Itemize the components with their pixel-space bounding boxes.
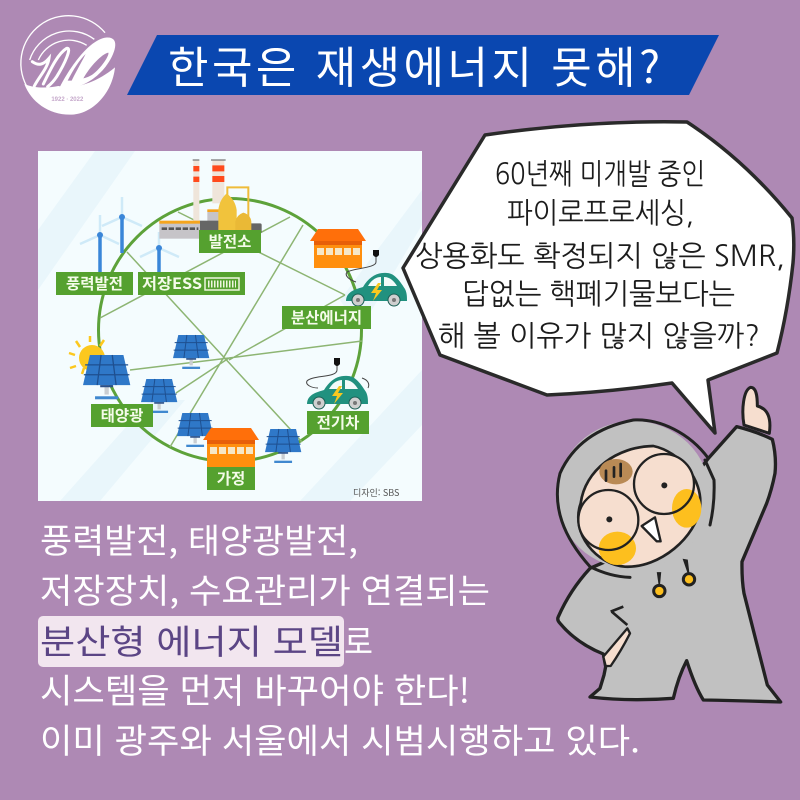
labels: network nodes: 분산에너지 <box>291 306 362 328</box>
bubble text: 해 볼 이유가 많지 않을까? <box>438 321 760 351</box>
hoodie strings <box>657 559 689 587</box>
glasses fill <box>634 454 694 514</box>
icon: houses <box>203 229 366 467</box>
body text: 로 <box>344 615 373 664</box>
icon: electric cars <box>307 250 407 409</box>
labels: network nodes: 가정 <box>217 467 245 489</box>
logo: university centennial emblem <box>21 16 115 115</box>
face <box>578 446 700 567</box>
birthmark <box>599 459 633 484</box>
icon: solar panels <box>83 335 301 463</box>
credit: 디자인: SBS <box>353 486 399 499</box>
labels: network nodes: 풍력발전 <box>66 272 123 294</box>
labels: network nodes: 태양광 <box>101 404 143 426</box>
body text <box>38 514 640 763</box>
panel: distributed energy network diagram <box>38 151 422 501</box>
raised hand <box>743 387 770 433</box>
hood <box>557 421 710 569</box>
bubble text <box>415 160 785 351</box>
labels: network nodes: 전기차 <box>317 411 359 433</box>
body text: 저장장치, 수요관리가 연결되는 <box>40 564 490 613</box>
title banner <box>127 32 719 96</box>
network ring <box>98 198 362 462</box>
pocket line <box>611 607 627 625</box>
title text: 한국은 재생에너지 못해? <box>168 32 660 96</box>
highlight: distributed energy model: 분산형 에너지 모델 <box>40 615 343 664</box>
body text: 풍력발전, 태양광발전, <box>40 514 358 563</box>
suit body <box>558 427 781 702</box>
logo: university centennial emblem: 1922 · 2022 <box>51 97 84 103</box>
labels: network nodes: 저장ESS <box>142 272 202 294</box>
character: hooded figure pointing up <box>557 387 781 702</box>
bubble text: 60년째 미개발 중인 <box>495 160 705 189</box>
glasses <box>634 454 694 514</box>
icon: wind turbines <box>80 197 179 272</box>
mouth <box>642 517 661 541</box>
lower hand <box>603 628 630 666</box>
icon: power plant <box>159 160 262 239</box>
bubble text: 상용화도 확정되지 않은 SMR, <box>415 241 785 271</box>
cheeks <box>672 489 701 528</box>
body text: 시스템을 먼저 바꾸어야 한다! <box>40 664 470 713</box>
bubble text: 답없는 핵폐기물보다는 <box>462 280 735 309</box>
speech bubble <box>403 122 794 433</box>
body text: 이미 광주와 서울에서 시범시행하고 있다. <box>40 714 640 763</box>
icon: sun <box>69 336 105 374</box>
eyes <box>661 482 667 488</box>
connection lines <box>100 212 362 447</box>
labels: network nodes <box>56 230 371 490</box>
labels: network nodes: 발전소 <box>209 230 251 252</box>
bubble text: 파이로프로세싱, <box>507 199 694 228</box>
